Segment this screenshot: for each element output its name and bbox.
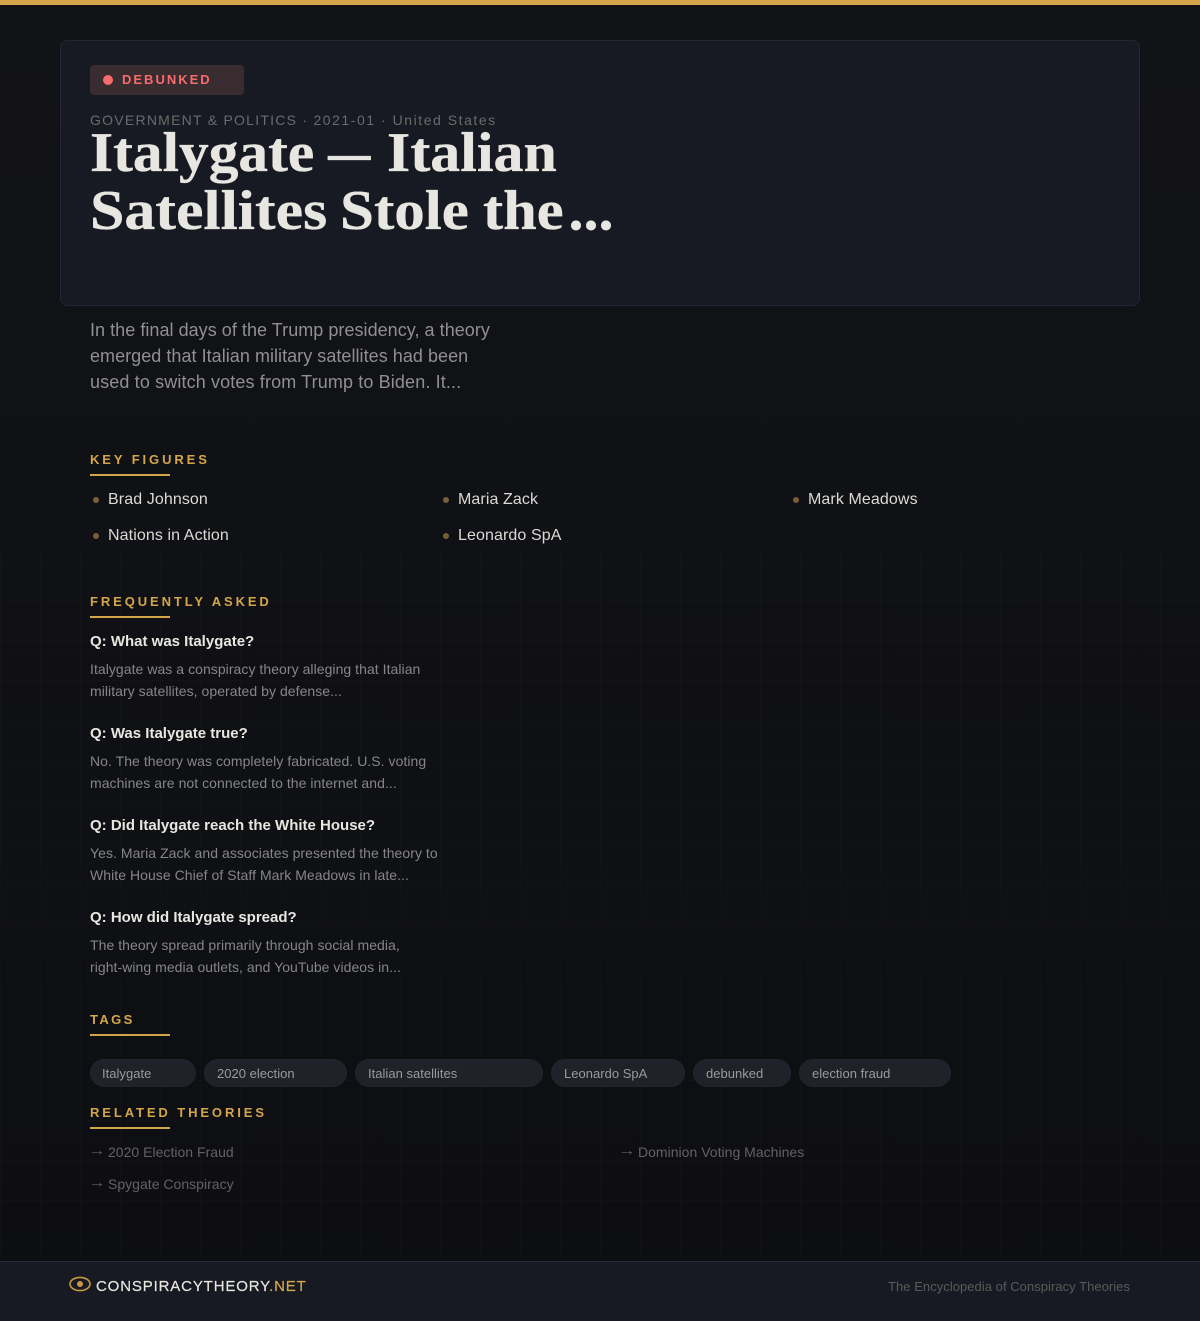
title: — (328, 122, 371, 184)
title: Italygate (90, 122, 314, 184)
tag: election fraud (812, 1066, 890, 1081)
answer 4: The theory spread primarily through social media, (90, 937, 400, 953)
answer 1: military satellites, operated by defense... (90, 683, 342, 699)
tag (551, 1059, 685, 1087)
heading: related theories: RELATED THEORIES (90, 1105, 267, 1120)
tag: Leonardo SpA (564, 1066, 647, 1081)
panel: hero (60, 40, 1140, 306)
logo wordmark: CONSPIRACYTHEORY.NET (96, 1278, 307, 1295)
link: Spygate Conspiracy: → (88, 1174, 106, 1190)
answer 1: Italygate was a conspiracy theory alleging that Italian (90, 661, 420, 677)
answer 3: Yes. Maria Zack and associates presented the theory to (90, 845, 438, 861)
question 2: Q: Was Italygate true? (90, 725, 248, 742)
heading: tags: TAGS (90, 1012, 135, 1027)
summary: In the final days of the Trump presidency, a theory (90, 320, 490, 340)
link: Spygate Conspiracy: Spygate Conspiracy (108, 1176, 234, 1192)
panel: key figures (90, 452, 918, 544)
title: Italian (387, 122, 557, 184)
heading: frequently asked: FREQUENTLY ASKED (90, 594, 272, 609)
heading: key figures: KEY FIGURES (90, 452, 210, 467)
summary (90, 320, 490, 392)
answer 2 (90, 753, 426, 791)
tag (90, 1059, 196, 1087)
tag (693, 1059, 791, 1087)
tag (799, 1059, 951, 1087)
answer 1 (90, 661, 420, 699)
tag (204, 1059, 347, 1087)
panel: tags (90, 1012, 951, 1087)
badge: debunked (90, 65, 244, 95)
question 1: Q: What was Italygate? (90, 633, 254, 650)
figure: Nations in Action: Nations in Action (108, 527, 229, 544)
panel: frequently asked (90, 594, 438, 975)
figure: Maria Zack: Maria Zack (458, 491, 538, 508)
link: Dominion Voting Machines: → (618, 1142, 636, 1158)
answer 4 (90, 937, 401, 975)
link: 2020 Election Fraud: → (88, 1142, 106, 1158)
title: Satellites (90, 180, 327, 242)
answer 2: machines are not connected to the internet and... (90, 775, 397, 791)
tag (355, 1059, 543, 1087)
tagline: The Encyclopedia of Conspiracy Theories (888, 1279, 1130, 1294)
link: Dominion Voting Machines: Dominion Voting Machines (638, 1144, 804, 1160)
answer 2: No. The theory was completely fabricated. U.S. voting (90, 753, 426, 769)
figure: Mark Meadows: Mark Meadows (808, 491, 918, 508)
link: 2020 Election Fraud: 2020 Election Fraud (108, 1144, 234, 1160)
figure: Leonardo SpA: Leonardo SpA (458, 527, 562, 544)
badge: debunked: DEBUNKED (122, 72, 212, 87)
title: ... (569, 180, 614, 242)
footer (0, 1261, 1200, 1321)
figure: Brad Johnson: Brad Johnson (108, 491, 208, 508)
answer 3: White House Chief of Staff Mark Meadows in late... (90, 867, 409, 883)
title (90, 122, 614, 242)
question 4: Q: How did Italygate spread? (90, 909, 297, 926)
question 3: Q: Did Italygate reach the White House? (90, 817, 375, 834)
panel: related theories (88, 1105, 804, 1192)
title: Stole (340, 180, 469, 242)
tag: debunked (706, 1066, 763, 1081)
summary: used to switch votes from Trump to Biden. It... (90, 372, 461, 392)
tag: 2020 election (217, 1066, 295, 1081)
title: the (483, 180, 564, 242)
icon: eye logo (69, 1276, 91, 1292)
answer 3 (90, 845, 438, 883)
summary: emerged that Italian military satellites had been (90, 346, 468, 366)
tag: Italian satellites (368, 1066, 457, 1081)
category and date line: GOVERNMENT & POLITICS · 2021-01 · United States (90, 112, 497, 128)
answer 4: right-wing media outlets, and YouTube videos in... (90, 959, 401, 975)
tag: Italygate (102, 1066, 151, 1081)
